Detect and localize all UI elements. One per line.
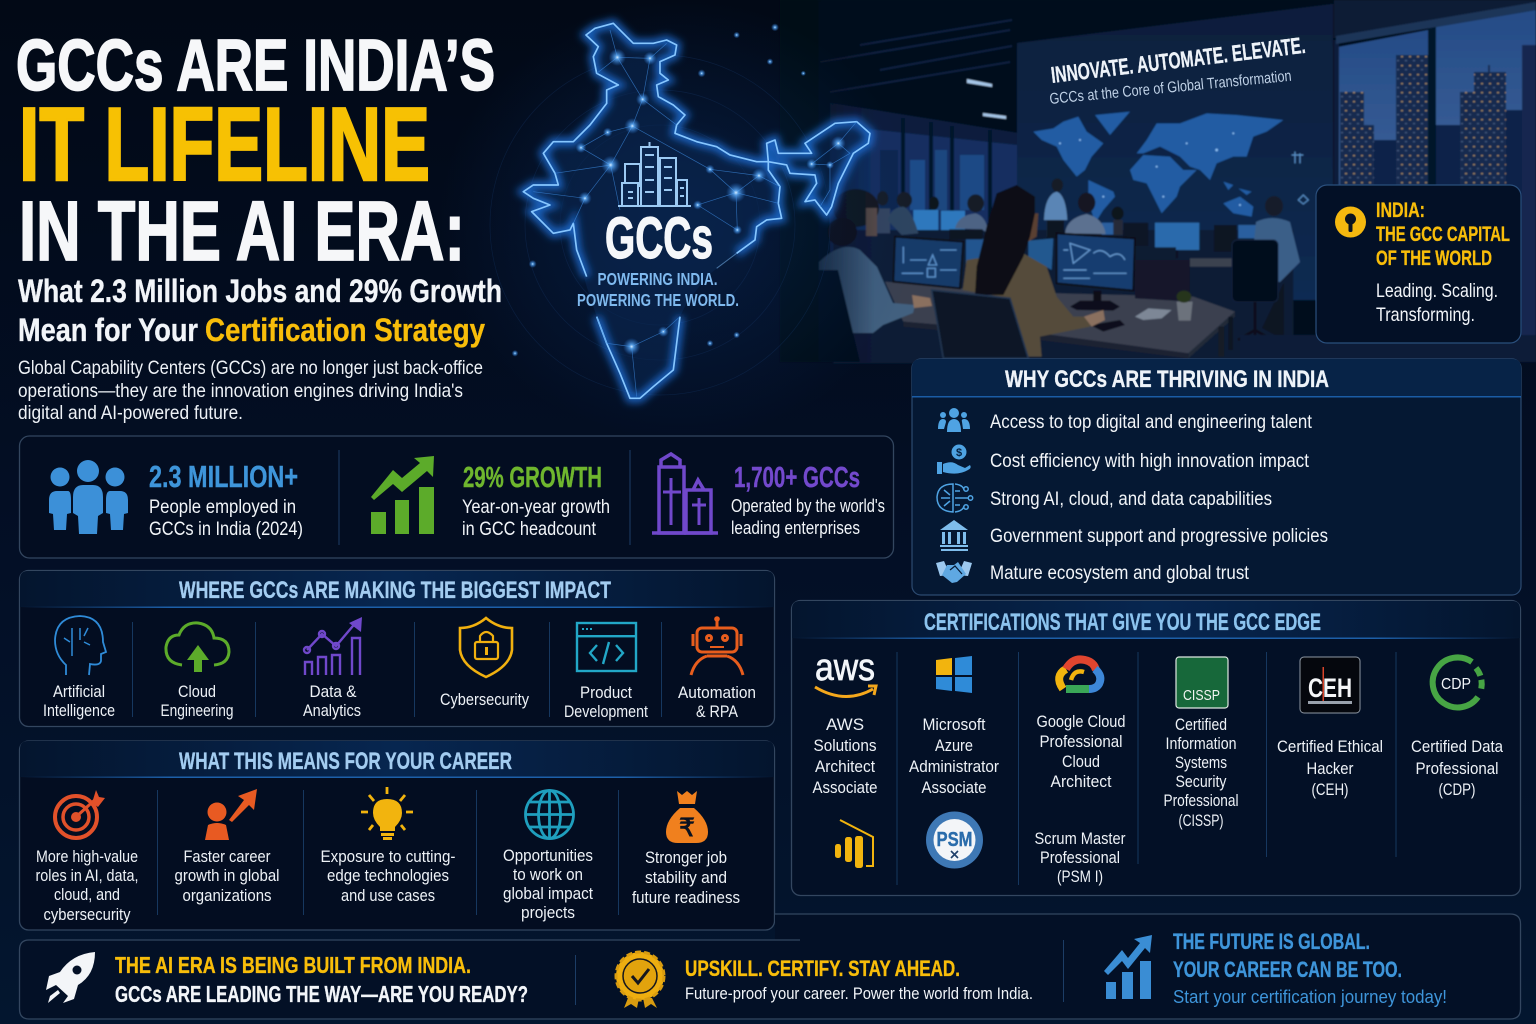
- cert: CDP: (CDP): [1438, 780, 1476, 799]
- front desk with screens: [885, 233, 1235, 358]
- icon: rising bars: [371, 456, 434, 534]
- stat: growth: Year-on-year growth: [462, 497, 610, 518]
- message: AI era: THE AI ERA IS BEING BUILT FROM INDIA.: [115, 952, 471, 978]
- item: Cost efficiency with high innovation impact: [990, 451, 1310, 472]
- item: artificial intelligence: [43, 616, 115, 720]
- subtitle: What 2.3 Million Jobs and 29% Growth: [18, 273, 502, 309]
- cert: Microsoft Azure: Administrator: [909, 757, 999, 776]
- item: cutting-edge technologies: edge technologies: [327, 866, 449, 885]
- icon: hand with coin: $: [956, 447, 962, 459]
- world map on screen: [1033, 112, 1308, 223]
- icon: handshake: [936, 561, 972, 583]
- ceiling beams: [820, 20, 1012, 92]
- item: global projects: [503, 790, 593, 922]
- item: faster growth: Faster career: [184, 847, 271, 866]
- message: upskill: [685, 956, 1033, 1003]
- icon: purple towers: [652, 454, 718, 533]
- cert: CEH: (CEH): [1312, 780, 1348, 799]
- item: high-value roles: cloud, and: [54, 885, 120, 904]
- item: Access to top digital and engineering talent: [990, 412, 1313, 433]
- icon: government building: [940, 520, 968, 551]
- centre monitor: [1057, 233, 1135, 291]
- callout: India GCC capital: Leading. Scaling.: [1376, 280, 1498, 302]
- back monitors: [913, 210, 938, 230]
- icon: talent group: [938, 408, 970, 432]
- India network map: [440, 0, 920, 440]
- subtitle: Mean for Your: [18, 312, 198, 348]
- subtitle: Certification Strategy: [205, 312, 485, 348]
- seated and standing colleagues: [876, 178, 1124, 239]
- item: high-value roles: roles in AI, data,: [36, 866, 138, 885]
- heading: WHY GCCs ARE THRIVING IN INDIA: [1005, 366, 1329, 393]
- screen slogan: INNOVATE. AUTOMATE. ELEVATE.: [1050, 32, 1307, 88]
- cert: CISSP: [1164, 657, 1238, 830]
- cert: CDP: [1411, 657, 1503, 799]
- panel: biggest impact: [20, 570, 774, 726]
- item: global projects: global impact: [503, 884, 593, 903]
- cert: CISSP: (CISSP): [1178, 811, 1224, 830]
- GCCs label: GCCs: [605, 206, 713, 271]
- item: global projects: Opportunities: [503, 846, 593, 865]
- cert: Google Cloud: Architect: [1050, 772, 1112, 791]
- stat: people employed: People employed in: [149, 497, 296, 518]
- intro paragraph: digital and AI-powered future.: [18, 402, 243, 424]
- callout: India GCC capital: INDIA:: [1376, 199, 1425, 222]
- badge: PSM: PSM: [936, 829, 972, 851]
- cert: CEH: [1277, 657, 1383, 799]
- item: data and analytics: Data &: [310, 682, 357, 701]
- cert: Microsoft Azure: Microsoft: [922, 715, 986, 734]
- panel: certifications: [792, 600, 1520, 896]
- cert: CDP: Professional: [1416, 759, 1498, 778]
- message: AI era: GCCs ARE LEADING THE WAY—ARE YOU READY?: [115, 981, 528, 1007]
- left monitor: [893, 237, 963, 288]
- item: artificial intelligence: Intelligence: [43, 701, 115, 720]
- title: [16, 26, 495, 278]
- cert: CISSP: Professional: [1164, 791, 1238, 810]
- cert: CDP: Certified Data: [1411, 737, 1503, 756]
- cert: Microsoft Azure: Associate: [922, 778, 986, 797]
- subtitle: [18, 273, 502, 348]
- icon: people: [49, 460, 128, 534]
- woman at centre: [932, 185, 1105, 358]
- item: high-value roles: [36, 790, 138, 924]
- desk top: [885, 282, 1235, 353]
- stat: people employed: GCCs in India (2024): [149, 519, 303, 540]
- panel: why GCCs are thriving: [912, 359, 1521, 595]
- cert: AWS: Associate: [812, 778, 878, 797]
- callout: India GCC capital: OF THE WORLD: [1376, 247, 1492, 270]
- title: IN THE AI ERA:: [19, 184, 465, 278]
- stat: people employed: 2.3 MILLION+: [149, 459, 298, 494]
- panel: bottom call-to-action banner: [20, 914, 1520, 1019]
- cert: Scrum Master: Scrum Master: [1034, 829, 1126, 848]
- stat: GCC count: leading enterprises: [731, 518, 860, 538]
- item: cybersecurity: [440, 618, 529, 709]
- icon: location keyhole: [1335, 206, 1366, 238]
- item: cutting-edge technologies: Exposure to cutting-: [320, 847, 456, 866]
- item: Government support and progressive policies: [990, 526, 1328, 547]
- callout: India GCC capital: [1316, 185, 1521, 343]
- map tagline: POWERING THE WORLD.: [577, 290, 739, 310]
- radar arcs: [490, 55, 830, 395]
- item: automation and RPA: Automation: [678, 683, 756, 702]
- item: product development: [564, 623, 648, 721]
- message: future is global: [1173, 929, 1447, 1007]
- heading: CERTIFICATIONS THAT GIVE YOU THE GCC EDGE: [924, 609, 1321, 636]
- callout: India GCC capital: Transforming.: [1376, 304, 1475, 326]
- cert: Scrum Master: (PSM I): [1057, 867, 1103, 886]
- item: product development: Product: [580, 683, 632, 702]
- item: cloud engineering: Engineering: [160, 701, 234, 720]
- cert: CISSP: CISSP: [1183, 687, 1220, 704]
- man on left: [790, 189, 932, 362]
- item: cybersecurity: Cybersecurity: [440, 690, 529, 709]
- cert: CISSP: Security: [1176, 772, 1227, 791]
- item: global projects: to work on: [513, 865, 583, 884]
- stat: growth: in GCC headcount: [462, 519, 597, 540]
- cert: AWS: Architect: [815, 757, 875, 776]
- message: future is global: YOUR CAREER CAN BE TOO.: [1173, 957, 1402, 982]
- heading: WHERE GCCs ARE MAKING THE BIGGEST IMPACT: [179, 577, 611, 604]
- cert: AWS: aws: [815, 647, 875, 689]
- icon: rocket: [46, 952, 95, 1003]
- item: job stability: stability and: [645, 868, 727, 887]
- item: global projects: projects: [521, 903, 575, 922]
- item: faster growth: [174, 789, 280, 905]
- stat: GCC count: Operated by the world's: [731, 496, 885, 516]
- cert: Scrum Master: [1034, 829, 1126, 886]
- message: AI era: [115, 952, 528, 1007]
- stat: people employed: [49, 459, 303, 540]
- icon: AI brain: [937, 484, 973, 512]
- message: future is global: Start your certification journey today!: [1173, 986, 1447, 1007]
- cert: Google Cloud: [1036, 659, 1126, 791]
- cert: Microsoft Azure: [909, 656, 999, 797]
- badge: PSM: [926, 812, 983, 868]
- item: automation and RPA: & RPA: [696, 702, 739, 721]
- item: faster growth: organizations: [182, 886, 272, 905]
- icon: Power BI: [835, 820, 873, 868]
- network nodes: [512, 23, 846, 357]
- stat: GCC count: [652, 454, 885, 538]
- cert: CDP: CDP: [1441, 676, 1471, 693]
- cert: Google Cloud: Google Cloud: [1036, 712, 1126, 731]
- item: faster growth: growth in global: [174, 866, 280, 885]
- back row desks and floor: [833, 210, 1293, 363]
- map tagline: [577, 269, 739, 310]
- cert: CEH: Hacker: [1306, 759, 1354, 778]
- cert: Google Cloud: Professional: [1040, 732, 1122, 751]
- item: high-value roles: cybersecurity: [44, 905, 131, 924]
- item: job stability: Stronger job: [645, 848, 727, 867]
- icon: medal badge: [616, 952, 664, 1008]
- item: cutting-edge technologies: [320, 787, 456, 905]
- cert: CISSP: Information: [1166, 734, 1236, 753]
- cert: AWS: AWS: [826, 715, 864, 734]
- right window skyline: [1334, 0, 1536, 360]
- title: IT LIFELINE: [19, 87, 430, 203]
- cert: CISSP: Systems: [1175, 753, 1227, 772]
- stat: growth: 29% GROWTH: [463, 462, 602, 494]
- cert: CISSP: Certified: [1175, 715, 1227, 734]
- map tagline: POWERING INDIA.: [598, 269, 718, 289]
- building icon: [618, 142, 691, 206]
- item: job stability: ₹: [679, 814, 695, 842]
- fade into dark background: [780, 0, 875, 362]
- item: data and analytics: Analytics: [303, 701, 361, 720]
- panel: headline stats: [20, 436, 894, 558]
- item: job stability: [632, 791, 740, 907]
- office photo: team at workstations beneath a global wall screen: [780, 0, 1536, 363]
- item: product development: Development: [564, 702, 648, 721]
- outline: [523, 23, 870, 398]
- ceiling lights: [967, 79, 1006, 119]
- item: high-value roles: More high-value: [36, 847, 138, 866]
- cert: AWS: [812, 647, 878, 797]
- message: future is global: THE FUTURE IS GLOBAL.: [1173, 929, 1370, 954]
- item: cutting-edge technologies: and use cases: [341, 886, 435, 905]
- screen slogan: GCCs at the Core of Global Transformation: [1049, 68, 1292, 108]
- wall screen: [1017, 4, 1333, 300]
- intro paragraph: operations—they are the innovation engines driving India's: [18, 380, 463, 402]
- item: Strong AI, cloud, and data capabilities: [990, 489, 1272, 510]
- title: GCCs ARE INDIA’S: [16, 26, 495, 106]
- heading: WHAT THIS MEANS FOR YOUR CAREER: [179, 748, 512, 775]
- item: Mature ecosystem and global trust: [990, 563, 1250, 584]
- stat: GCC count: 1,700+ GCCs: [734, 462, 860, 494]
- message: upskill: UPSKILL. CERTIFY. STAY AHEAD.: [685, 956, 960, 981]
- stat: growth: [371, 456, 610, 540]
- floor beneath callout: [1240, 335, 1536, 362]
- plant pot: [1177, 302, 1193, 321]
- left windows: [830, 103, 1017, 300]
- icon: blue growth chart: [1104, 935, 1152, 999]
- cert: CEH: Certified Ethical: [1277, 737, 1383, 756]
- item: cloud engineering: Cloud: [178, 682, 216, 701]
- outline glow: [523, 23, 870, 398]
- cert: Google Cloud: Cloud: [1062, 752, 1100, 771]
- screen slogan: [1049, 32, 1307, 108]
- item: data and analytics: [303, 617, 362, 720]
- network links: [533, 30, 857, 397]
- keyboard: [1090, 320, 1125, 332]
- message: upskill: Future-proof your career. Power the world from India.: [685, 985, 1033, 1003]
- intro paragraph: Global Capability Centers (GCCs) are no longer just back-office: [18, 357, 483, 379]
- man at right: [1232, 196, 1300, 340]
- cert: Microsoft Azure: Azure: [935, 736, 973, 755]
- intro paragraph: [18, 357, 483, 424]
- icon: hand with coin: [937, 444, 971, 474]
- landmass fill: [523, 23, 870, 398]
- cert: AWS: Solutions: [814, 736, 876, 755]
- item: job stability: future readiness: [632, 888, 740, 907]
- item: artificial intelligence: Artificial: [53, 682, 105, 701]
- monitor back: [1135, 260, 1190, 302]
- cert: CEH: CEH: [1308, 673, 1352, 703]
- item: automation and RPA: [678, 616, 756, 721]
- panel: career impact: [20, 741, 774, 930]
- item: cloud engineering: [160, 623, 234, 720]
- cert: Scrum Master: Professional: [1040, 848, 1120, 867]
